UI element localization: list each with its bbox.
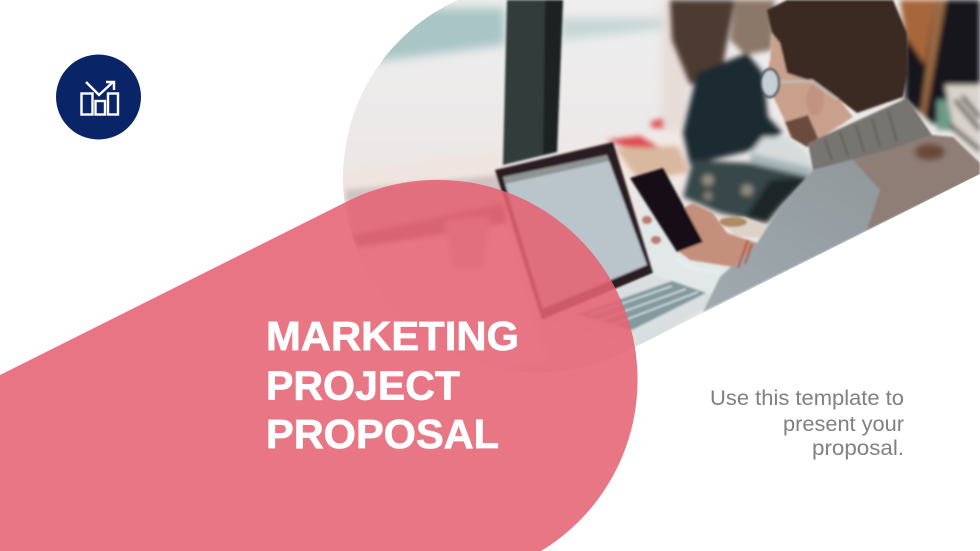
pink rounded banner	[0, 180, 638, 551]
title	[266, 313, 519, 457]
subtitle: present your	[783, 413, 904, 436]
cafe background people and furniture	[670, 0, 980, 223]
wooden table and red items	[606, 118, 690, 182]
title: PROPOSAL	[266, 411, 499, 457]
title: PROJECT	[266, 362, 460, 408]
window street background	[378, 0, 688, 162]
subtitle: proposal.	[812, 437, 904, 460]
icon: growth bar chart badge	[56, 54, 141, 140]
subtitle	[710, 387, 904, 460]
photo: man working at laptop in cafe	[340, 0, 980, 380]
subtitle: Use this template to	[710, 387, 904, 410]
window pillar	[503, 0, 563, 165]
table surface	[642, 204, 728, 292]
laptop	[495, 142, 722, 348]
bench and glass behind overlay	[344, 174, 506, 246]
man in grey sweater	[630, 0, 980, 312]
title: MARKETING	[266, 313, 519, 359]
plate and coffee cup	[718, 216, 766, 238]
